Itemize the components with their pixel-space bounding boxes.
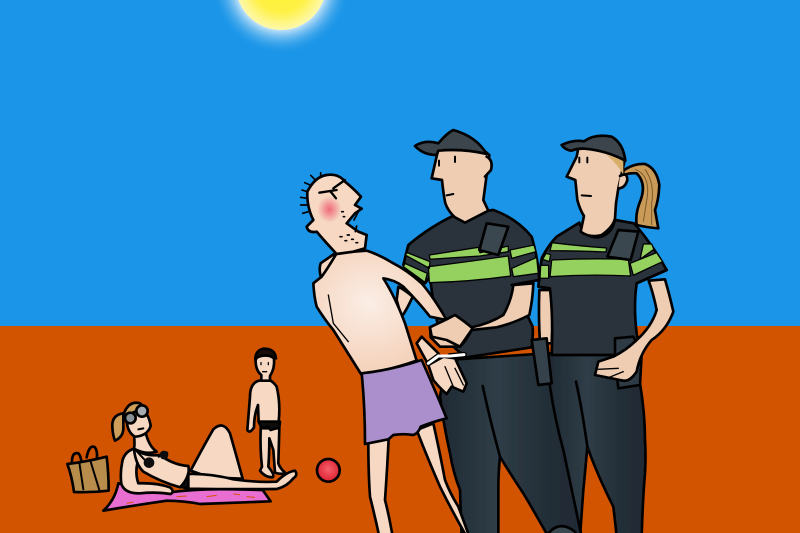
straight leg [187, 471, 296, 489]
torso [247, 380, 279, 431]
legs [368, 438, 393, 533]
officer 1 trousers [440, 353, 582, 533]
sky [0, 0, 800, 327]
officer 2 shirt [538, 220, 667, 355]
trouser creases [483, 382, 587, 457]
face [261, 363, 268, 372]
handcuffs [428, 355, 464, 363]
officer 2 trousers [548, 353, 645, 533]
beach bag [67, 447, 109, 492]
radio [479, 223, 508, 255]
sleeve cuff [637, 270, 667, 283]
hand on shoulder [320, 254, 337, 279]
woman sunbathing [112, 403, 296, 494]
stubble hair [301, 173, 321, 213]
towel [103, 483, 271, 511]
towel speckles [127, 494, 255, 503]
neck [134, 434, 157, 453]
right arm [595, 279, 673, 381]
torso [313, 251, 447, 375]
suspect's far arm [397, 287, 413, 317]
officer 1 shirt [403, 210, 539, 357]
bent leg [191, 425, 243, 479]
green stripes [540, 243, 663, 278]
child [247, 349, 285, 477]
head [256, 355, 274, 381]
shorts [362, 360, 447, 444]
officer 1 shoe [548, 526, 577, 533]
beach family [67, 349, 340, 511]
cap [415, 130, 487, 155]
baton holster [532, 338, 552, 385]
officer 2 [538, 136, 673, 388]
sunglasses [125, 405, 148, 423]
neck and face [432, 147, 489, 223]
swim trunks [259, 422, 280, 430]
officer 2 left arm [539, 290, 552, 343]
ground [0, 326, 800, 533]
ponytail strands [635, 169, 652, 225]
bikini top [134, 448, 168, 468]
hair [123, 403, 143, 415]
angry eye [319, 180, 345, 198]
ear [618, 175, 627, 188]
officer 1 [403, 130, 539, 357]
spine line [328, 295, 348, 342]
facial features [439, 157, 455, 195]
cap [562, 136, 625, 161]
neck and face [567, 147, 624, 236]
legs [260, 428, 285, 477]
ponytail [623, 164, 659, 228]
blonde hair [607, 155, 623, 175]
arm [121, 448, 173, 494]
mouth [138, 425, 143, 432]
gun holster [615, 337, 642, 388]
green stripes [403, 245, 538, 283]
curly hair [255, 349, 276, 360]
bikini bottom [181, 473, 188, 489]
hands behind back [428, 357, 467, 394]
sleeve cuff [512, 280, 539, 285]
torso [134, 448, 189, 487]
sun [211, 0, 351, 55]
officer 1 right arm [430, 283, 533, 347]
ear [485, 157, 492, 177]
head [307, 175, 367, 254]
handcuffed suspect [301, 173, 473, 394]
woman's head [127, 408, 151, 437]
fingers [598, 368, 623, 378]
officers upper bodies [403, 130, 673, 388]
shorts and legs of suspect [362, 360, 469, 533]
blush [317, 196, 341, 223]
teeth and beard dots [340, 212, 358, 243]
ball [317, 459, 340, 482]
police lower bodies [440, 353, 645, 533]
radio [607, 230, 638, 260]
lower arm [417, 337, 438, 368]
facial features [579, 158, 591, 196]
officer's hand [430, 315, 473, 347]
ponytail [112, 413, 123, 441]
